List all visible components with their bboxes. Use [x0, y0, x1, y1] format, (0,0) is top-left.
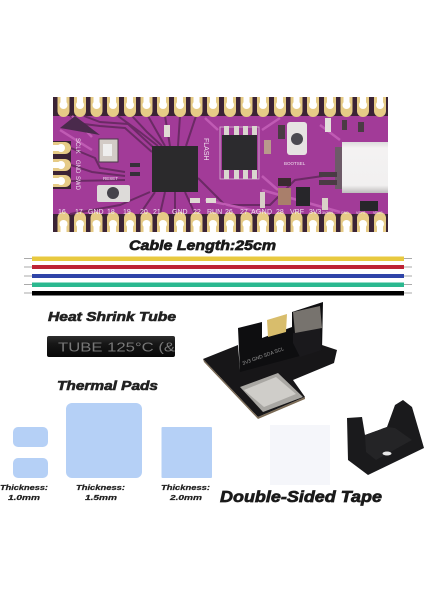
upright board: [238, 302, 323, 372]
label: thickness 2.0mm: 2.0mm: [169, 493, 202, 502]
heat shrink tube: [47, 336, 175, 357]
black plastic holder: [347, 400, 424, 475]
silkscreen pin labels: GND: [341, 211, 349, 215]
silkscreen pin labels: 19: [123, 209, 131, 216]
silkscreen pin labels: FLASH: [202, 138, 209, 161]
yellow cable: [32, 256, 404, 261]
sd card slot: [240, 373, 303, 412]
silkscreen pin labels: 3V3EN: [322, 211, 334, 215]
double-sided tape sheet: [270, 425, 330, 485]
label: thickness 1.0mm: [0, 483, 49, 502]
silkscreen pin labels: GND: [74, 160, 80, 174]
top pads: [58, 97, 386, 117]
label: thickness 1.5mm: Thickness:: [76, 483, 126, 492]
thermal pad 1.5mm: [66, 403, 142, 478]
silkscreen pin labels: 17: [75, 209, 83, 216]
pad holes: [53, 97, 384, 232]
label: thickness 1.5mm: 1.5mm: [85, 493, 117, 502]
label: thickness 1.5mm: [76, 483, 126, 502]
cables: [24, 256, 412, 296]
silkscreen pin labels: BOOTSEL: [284, 161, 306, 166]
label: thickness 2.0mm: [161, 483, 211, 502]
gold edge connector: [267, 314, 287, 337]
silkscreen pin labels: 27: [240, 209, 248, 216]
adapter board: [203, 302, 337, 419]
heading: double-sided tape: Double-Sided Tape: [220, 489, 382, 506]
circuit board: [53, 97, 388, 232]
silkscreen pin labels: 26: [225, 209, 233, 216]
title: cable length: Cable Length:25cm: [129, 237, 276, 253]
silkscreen pin labels: 16: [58, 209, 66, 216]
silkscreen: 3V3 GND SDA SCL: [242, 346, 285, 367]
pin header: [293, 306, 322, 357]
heat shrink tube: TUBE 125°C (&: [58, 340, 175, 354]
silkscreen pin labels: 3V3: [309, 209, 322, 216]
silkscreen pin labels: GND: [172, 209, 188, 216]
red cable: [32, 265, 404, 269]
silkscreen pin labels: VSYS: [356, 211, 366, 215]
silkscreen pin labels: SWD: [74, 176, 80, 191]
usb-c connector: [335, 142, 388, 193]
heading: thermal pads: Thermal Pads: [57, 379, 158, 393]
side pads: [53, 142, 71, 187]
label: thickness 2.0mm: Thickness:: [161, 483, 211, 492]
silkscreen pin labels: [58, 138, 383, 216]
silkscreen pin labels: 20: [140, 209, 148, 216]
silkscreen pin labels: VRF: [290, 209, 304, 216]
green cable: [32, 282, 404, 287]
label: thickness 1.0mm: Thickness:: [0, 483, 49, 492]
black cable: [32, 291, 404, 296]
silkscreen pin labels: 28: [276, 209, 284, 216]
edge strips and traces: [53, 97, 388, 232]
bootsel button: [287, 122, 307, 155]
silkscreen pin labels: AGND: [251, 209, 272, 216]
silkscreen pin labels: SCLK: [74, 138, 80, 154]
flash chip: [220, 126, 259, 179]
silkscreen pin labels: 21: [153, 209, 161, 216]
silkscreen pin labels: GND: [88, 209, 104, 216]
silkscreen pin labels: 18: [107, 209, 115, 216]
base plate: [203, 345, 337, 417]
crystal: [99, 139, 118, 162]
wire tips: [24, 258, 412, 293]
silkscreen pin labels: VBUS: [373, 211, 383, 215]
thermal pads 1.0mm: [13, 427, 48, 478]
reset button: [97, 185, 130, 202]
small components: [130, 118, 378, 211]
label: thickness 1.0mm: 1.0mm: [8, 493, 40, 502]
silkscreen pin labels: 22: [193, 209, 201, 216]
blue cable: [32, 274, 404, 278]
bottom pads: [58, 212, 386, 232]
RP2040 chip: [152, 146, 198, 192]
silkscreen pin labels: RUN: [207, 209, 222, 216]
heading: heat shrink tube: Heat Shrink Tube: [48, 310, 176, 324]
thermal pad 2.0mm: [162, 427, 212, 478]
silkscreen pin labels: RESET: [103, 176, 118, 181]
